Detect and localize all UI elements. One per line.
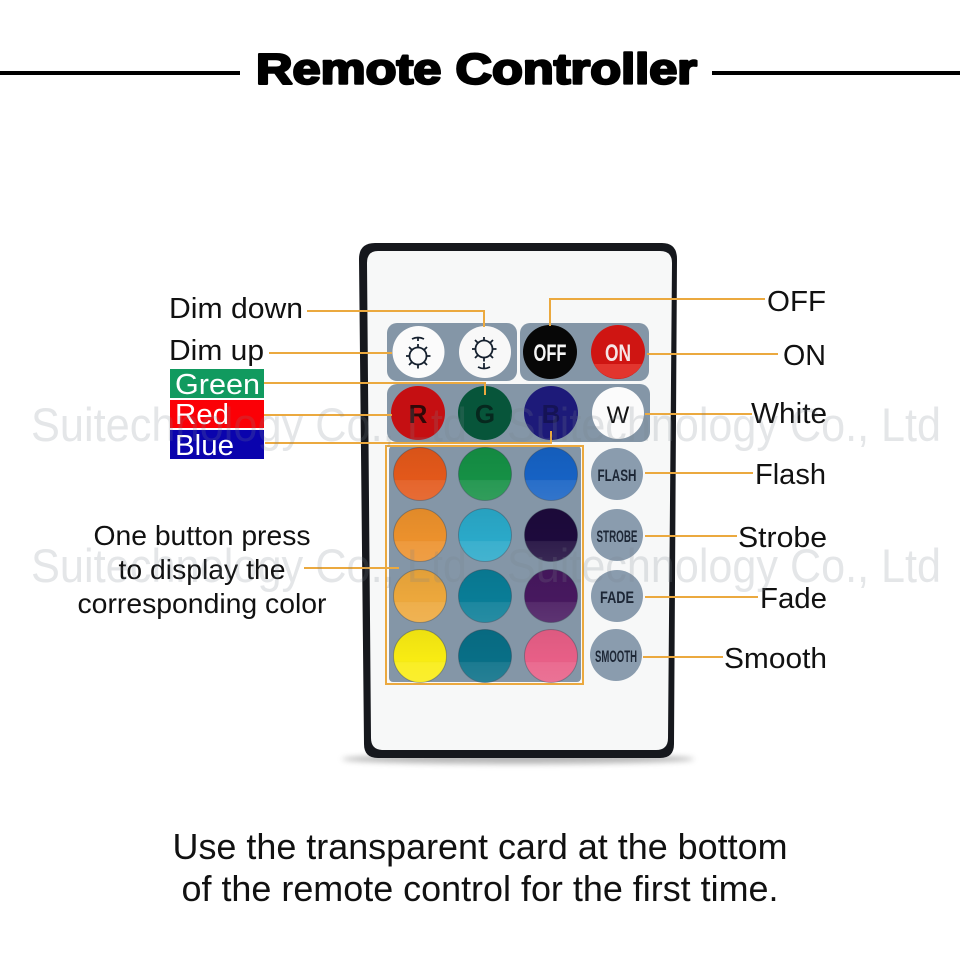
colour grid note: corresponding color bbox=[78, 588, 326, 619]
RGBW buttons: R bbox=[409, 399, 428, 429]
button panels bbox=[387, 323, 650, 682]
watermark: Suitechnology Co., Ltd bbox=[31, 539, 467, 592]
RGBW buttons: G bbox=[475, 399, 495, 429]
watermark: Suitechnology Co., Ltd bbox=[31, 398, 467, 451]
footer note: Use the transparent card at the bottom bbox=[172, 826, 788, 867]
colour grid note bbox=[78, 520, 326, 619]
title bbox=[0, 46, 960, 94]
icon: dim up sun bbox=[472, 337, 496, 368]
colour key labels: Red bbox=[175, 399, 229, 431]
left labels bbox=[169, 293, 303, 367]
mode buttons: FLASH bbox=[598, 466, 636, 485]
right labels: White bbox=[751, 398, 827, 430]
colour grid note: One button press bbox=[94, 520, 310, 551]
colour key labels bbox=[170, 369, 264, 462]
colour button grid bbox=[394, 448, 578, 682]
left labels: Dim up bbox=[169, 335, 264, 367]
power buttons bbox=[523, 325, 645, 379]
mode buttons: FADE bbox=[600, 588, 634, 607]
mode buttons: STROBE bbox=[596, 527, 638, 546]
right labels: OFF bbox=[767, 286, 826, 318]
mode buttons: SMOOTH bbox=[595, 647, 637, 666]
RGBW buttons: B bbox=[542, 399, 560, 429]
power buttons: ON bbox=[605, 340, 631, 367]
right labels bbox=[724, 286, 827, 675]
colour grid note: to display the bbox=[118, 554, 286, 585]
footer note: of the remote control for the first time. bbox=[182, 868, 778, 909]
callout lines bbox=[264, 299, 778, 684]
RGBW buttons bbox=[391, 386, 644, 440]
right labels: Fade bbox=[760, 583, 827, 615]
icon: dim down sun bbox=[406, 337, 430, 368]
mode buttons bbox=[590, 448, 643, 681]
right labels: Smooth bbox=[724, 643, 827, 675]
right labels: Strobe bbox=[738, 522, 827, 554]
left labels: Dim down bbox=[169, 293, 303, 325]
footer note bbox=[172, 826, 788, 909]
remote control body bbox=[342, 243, 694, 764]
watermark bbox=[31, 398, 941, 592]
colour key labels: Blue bbox=[175, 430, 234, 462]
right labels: Flash bbox=[755, 459, 826, 491]
title: Remote Controller bbox=[256, 46, 697, 94]
RGBW buttons: W bbox=[607, 402, 630, 429]
dim buttons bbox=[392, 326, 511, 378]
colour key labels: Green bbox=[175, 369, 260, 401]
power buttons: OFF bbox=[534, 340, 566, 367]
right labels: ON bbox=[783, 340, 826, 372]
